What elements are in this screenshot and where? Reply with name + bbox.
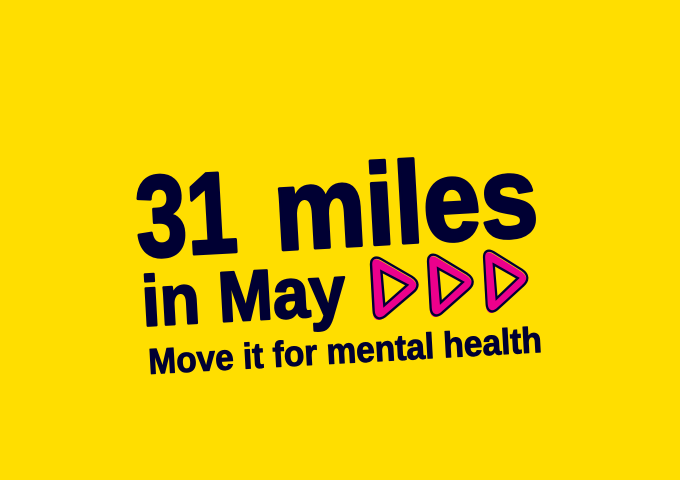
icon: play arrow 1 <box>370 255 419 320</box>
icon: three play arrows <box>370 249 529 320</box>
heading: 31 miles: 31 <box>132 149 240 282</box>
heading: 31 miles: miles <box>270 132 541 275</box>
heading: in May: in May <box>139 252 348 342</box>
icon: play arrow 3 <box>483 249 529 313</box>
heading: 31 miles <box>132 132 541 282</box>
icon: play arrow 2 <box>427 253 475 317</box>
tagline: Move it for mental health <box>147 319 543 382</box>
